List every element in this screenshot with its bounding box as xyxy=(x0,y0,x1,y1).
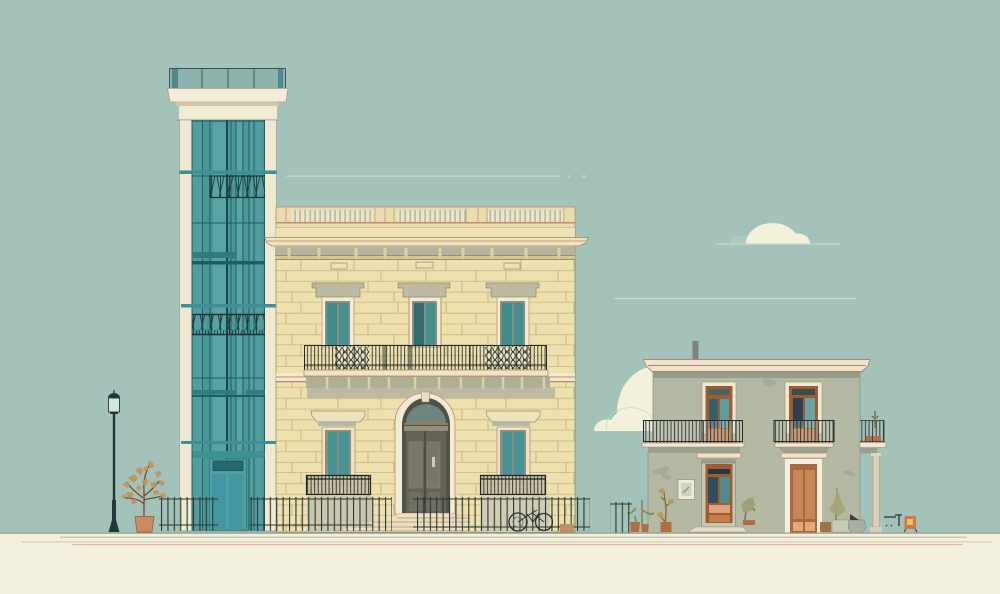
ground pavement xyxy=(0,532,1000,594)
cloud: upper right xyxy=(716,223,840,245)
entrance steps xyxy=(335,514,470,532)
roof balustrade xyxy=(276,207,575,228)
main cornice xyxy=(264,228,588,269)
lower door 1 steps xyxy=(688,527,747,532)
arched doorway xyxy=(395,392,455,514)
house wall xyxy=(648,372,860,533)
side balcony and column xyxy=(860,411,886,532)
chimney xyxy=(692,341,698,359)
house plants xyxy=(627,488,866,533)
upper door 1 xyxy=(702,382,736,444)
wall stains xyxy=(653,378,857,480)
thin horizon line left xyxy=(286,176,586,177)
street lamp xyxy=(108,390,120,532)
left small balcony xyxy=(306,475,371,495)
lower door 2 xyxy=(781,453,827,532)
tower entrance door xyxy=(192,451,264,530)
balcony 2 xyxy=(774,420,834,455)
house roof cornice xyxy=(644,360,870,378)
tower glass xyxy=(192,120,265,531)
lower right window xyxy=(486,411,540,476)
framed picture xyxy=(678,480,694,500)
brick wall xyxy=(276,228,575,532)
tower xyxy=(168,68,288,531)
thin horizon line right xyxy=(614,298,856,299)
tower roof railing xyxy=(170,68,286,88)
small street objects xyxy=(884,515,917,532)
upper centre window xyxy=(398,283,450,347)
balcony 1 xyxy=(642,420,744,453)
string course xyxy=(276,373,575,398)
lower left window xyxy=(311,411,365,476)
iron fence xyxy=(159,497,632,533)
left base stone xyxy=(307,496,373,532)
upper left window xyxy=(312,283,364,347)
cloud: behind small house xyxy=(594,367,660,431)
tower cornice xyxy=(168,88,288,121)
main balcony xyxy=(304,345,550,389)
lower door 1 xyxy=(697,453,741,527)
tower floor bands xyxy=(180,170,276,444)
planter by fence xyxy=(560,524,574,532)
main building xyxy=(264,207,588,532)
upper right window xyxy=(486,283,539,347)
right base stone xyxy=(480,496,550,532)
potted tree xyxy=(121,461,166,532)
right small balcony xyxy=(480,475,546,495)
tower lattice panels xyxy=(192,176,265,335)
bicycle xyxy=(509,509,552,531)
upper door 2 xyxy=(785,382,822,444)
tower pillars xyxy=(180,120,276,531)
small house xyxy=(627,341,917,533)
